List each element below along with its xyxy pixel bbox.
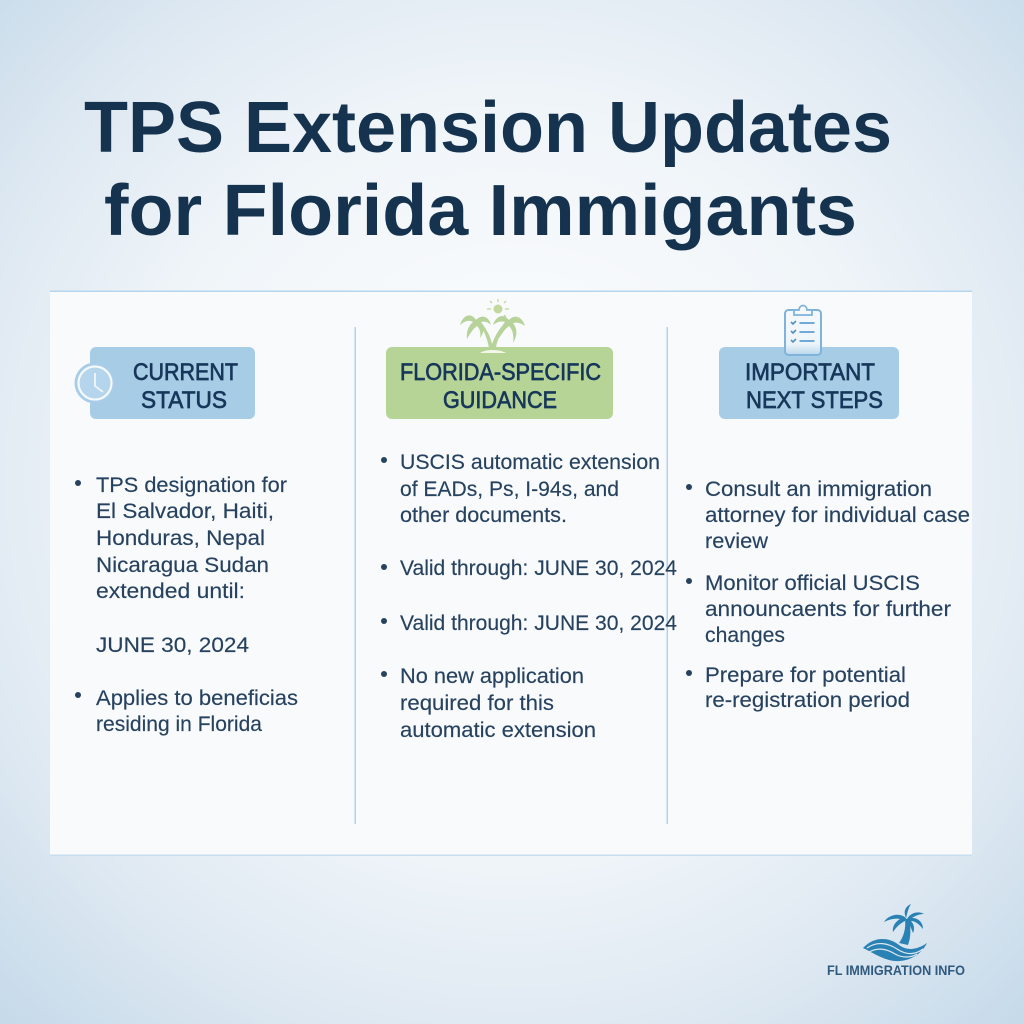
text: current status bullets: TPS designation for bbox=[96, 474, 287, 497]
icon: palm and waves bbox=[863, 904, 927, 961]
heading: current status: STATUS bbox=[141, 387, 227, 414]
text: next steps bullets: review bbox=[705, 530, 769, 553]
panel: important next steps bbox=[686, 306, 970, 712]
heading: important next steps: IMPORTANT bbox=[745, 359, 875, 386]
logo: FL Immigration Info bbox=[827, 904, 965, 978]
icon: clock bbox=[74, 362, 116, 404]
title: TPS Extension Updates bbox=[84, 88, 892, 168]
title: for Florida Immigants bbox=[104, 171, 857, 251]
panel: current status bbox=[74, 347, 298, 736]
heading: current status: CURRENT bbox=[133, 359, 238, 386]
text: current status bullets: Nicaragua Sudan bbox=[96, 554, 269, 577]
text: florida guidance bullets bbox=[381, 451, 677, 742]
title bbox=[84, 88, 892, 251]
heading: florida-specific guidance: FLORIDA-SPECIFIC bbox=[400, 359, 601, 386]
text: next steps bullets: attorney for individual case bbox=[705, 504, 970, 527]
text: current status bullets: extended until: bbox=[96, 580, 245, 603]
heading: florida-specific guidance bbox=[386, 347, 613, 419]
text: next steps bullets: Prepare for potential bbox=[705, 664, 906, 687]
icon: clipboard checklist bbox=[785, 306, 821, 355]
text: florida guidance bullets: USCIS automatic extension bbox=[400, 451, 660, 474]
heading: important next steps bbox=[719, 347, 899, 419]
text: current status bullets: Honduras, Nepal bbox=[96, 527, 265, 550]
text: current status bullets: residing in Florida bbox=[96, 713, 262, 736]
text: florida guidance bullets: Valid through: JUNE 30, 2024 bbox=[400, 557, 677, 580]
text: next steps bullets bbox=[686, 478, 970, 712]
panel: main card bbox=[50, 290, 972, 856]
heading: florida-specific guidance: GUIDANCE bbox=[443, 387, 557, 414]
text: current status bullets: JUNE 30, 2024 bbox=[96, 634, 249, 657]
icon: palm trees and sun bbox=[460, 299, 525, 348]
text: current status bullets bbox=[75, 474, 298, 736]
text: florida guidance bullets: Valid through: JUNE 30, 2024 bbox=[400, 612, 677, 635]
heading: current status bbox=[90, 347, 255, 419]
text: next steps bullets: Monitor official USCIS bbox=[705, 572, 920, 595]
text: next steps bullets: announcaents for further bbox=[705, 598, 951, 621]
text: next steps bullets: re-registration period bbox=[705, 689, 910, 712]
heading: important next steps: NEXT STEPS bbox=[746, 387, 883, 414]
text: florida guidance bullets: of EADs, Ps, I-94s, and bbox=[400, 478, 619, 501]
text: current status bullets: Applies to beneficias bbox=[96, 687, 298, 710]
text: logo wordmark: FL IMMIGRATION INFO bbox=[827, 962, 965, 978]
text: florida guidance bullets: required for this bbox=[400, 692, 554, 715]
text: next steps bullets: changes bbox=[705, 624, 785, 647]
text: next steps bullets: Consult an immigration bbox=[705, 478, 932, 501]
text: florida guidance bullets: other documents. bbox=[400, 504, 567, 527]
text: current status bullets: El Salvador, Haiti, bbox=[96, 500, 274, 523]
text: florida guidance bullets: automatic extension bbox=[400, 719, 596, 742]
text: florida guidance bullets: No new application bbox=[400, 665, 584, 688]
panel: florida-specific guidance bbox=[381, 299, 677, 742]
